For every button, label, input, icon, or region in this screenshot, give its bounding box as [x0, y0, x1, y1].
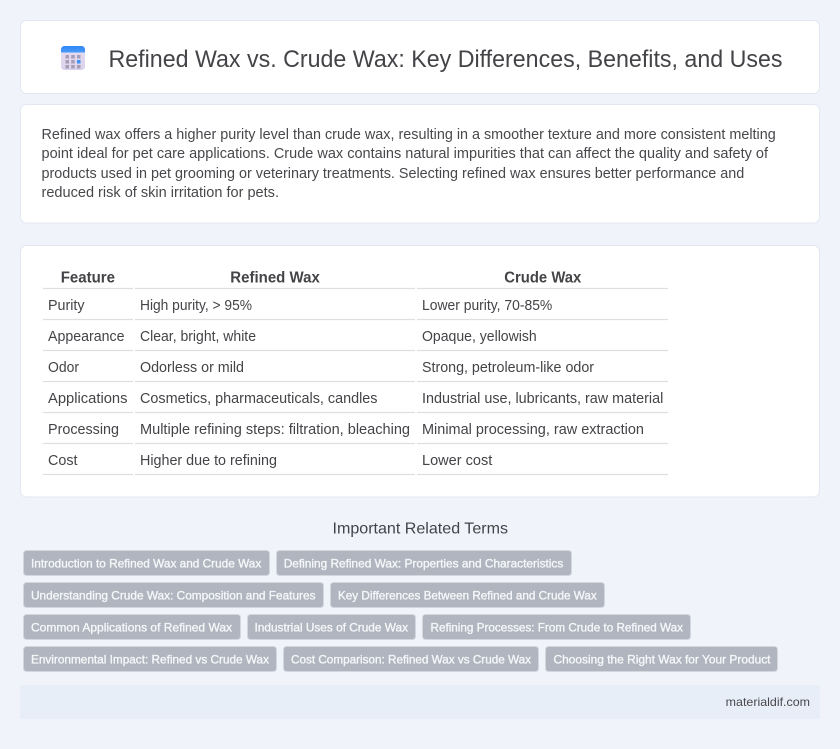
tag [276, 550, 572, 576]
row: purity: Purity [48, 298, 85, 314]
intro paragraph: point ideal for pet care applications. Crude wax contains natural impurities that can affect the quality and safety of [42, 146, 769, 162]
tag [546, 646, 778, 672]
row: cost [48, 453, 492, 469]
row: cost: Cost [48, 453, 78, 469]
tag [24, 582, 324, 608]
tag: Refining Processes: From Crude to Refined Wax [430, 620, 683, 634]
row: applications: Applications [48, 391, 128, 407]
row: purity [48, 298, 552, 314]
table header row: Refined Wax [230, 270, 320, 287]
tag [284, 646, 538, 672]
row: applications [48, 391, 663, 407]
tag [24, 646, 276, 672]
tag: Understanding Crude Wax: Composition and Features [31, 588, 316, 602]
tag: Defining Refined Wax: Properties and Characteristics [284, 556, 563, 570]
tag: Choosing the Right Wax for Your Product [554, 652, 771, 666]
footer source text: materialdif.com [726, 695, 810, 709]
tag [24, 614, 240, 640]
icon: calendar [61, 46, 85, 70]
tag: Key Differences Between Refined and Crude Wax [338, 588, 597, 602]
panel: header card [20, 20, 820, 94]
row: appearance: Appearance [48, 329, 124, 345]
row: odor: Strong, petroleum-like odor [422, 360, 594, 376]
footer bar [20, 685, 820, 719]
table header row: Crude Wax [504, 270, 581, 287]
tag: Common Applications of Refined Wax [31, 620, 232, 634]
tag [330, 582, 604, 608]
row: applications: Industrial use, lubricants, raw material [422, 391, 663, 407]
intro paragraph: reduced risk of skin irritation for pets. [42, 185, 279, 201]
tag [422, 614, 690, 640]
row: purity: Lower purity, 70-85% [422, 298, 552, 314]
tag [248, 614, 416, 640]
row: appearance [48, 329, 537, 345]
row: odor: Odorless or mild [140, 360, 244, 376]
related term tags [24, 550, 778, 672]
tag: Environmental Impact: Refined vs Crude Wax [31, 652, 269, 666]
row: processing: Processing [48, 422, 119, 438]
row: applications: Cosmetics, pharmaceuticals, candles [140, 391, 378, 407]
tag: Cost Comparison: Refined Wax vs Crude Wax [291, 652, 531, 666]
table header row [61, 270, 581, 287]
intro paragraph: Refined wax offers a higher purity level than crude wax, resulting in a smoother texture and more consistent melting [42, 127, 776, 143]
tag: Industrial Uses of Crude Wax [254, 620, 408, 634]
row: odor [48, 360, 594, 376]
table header row: Feature [61, 270, 115, 287]
row: appearance: Opaque, yellowish [422, 329, 537, 345]
row: purity: High purity, > 95% [140, 298, 252, 314]
intro paragraph [42, 127, 776, 201]
row: odor: Odor [48, 360, 79, 376]
title: Refined Wax vs. Crude Wax: Key Differences, Benefits, and Uses [108, 46, 782, 73]
row: processing: Minimal processing, raw extraction [422, 422, 644, 438]
row: processing: Multiple refining steps: filtration, bleaching [140, 422, 410, 438]
tag [24, 550, 270, 576]
row: appearance: Clear, bright, white [140, 329, 256, 345]
row: cost: Lower cost [422, 453, 492, 469]
intro paragraph: products used in pet grooming or veterinary treatments. Selecting refined wax ensures better performance and [42, 166, 744, 182]
tag: Introduction to Refined Wax and Crude Wax [31, 556, 261, 570]
row: processing [48, 422, 644, 438]
row: cost: Higher due to refining [140, 453, 277, 469]
heading: important related terms: Important Related Terms [332, 520, 508, 537]
panel: comparison table card [20, 246, 820, 497]
panel: intro text card [20, 104, 820, 223]
